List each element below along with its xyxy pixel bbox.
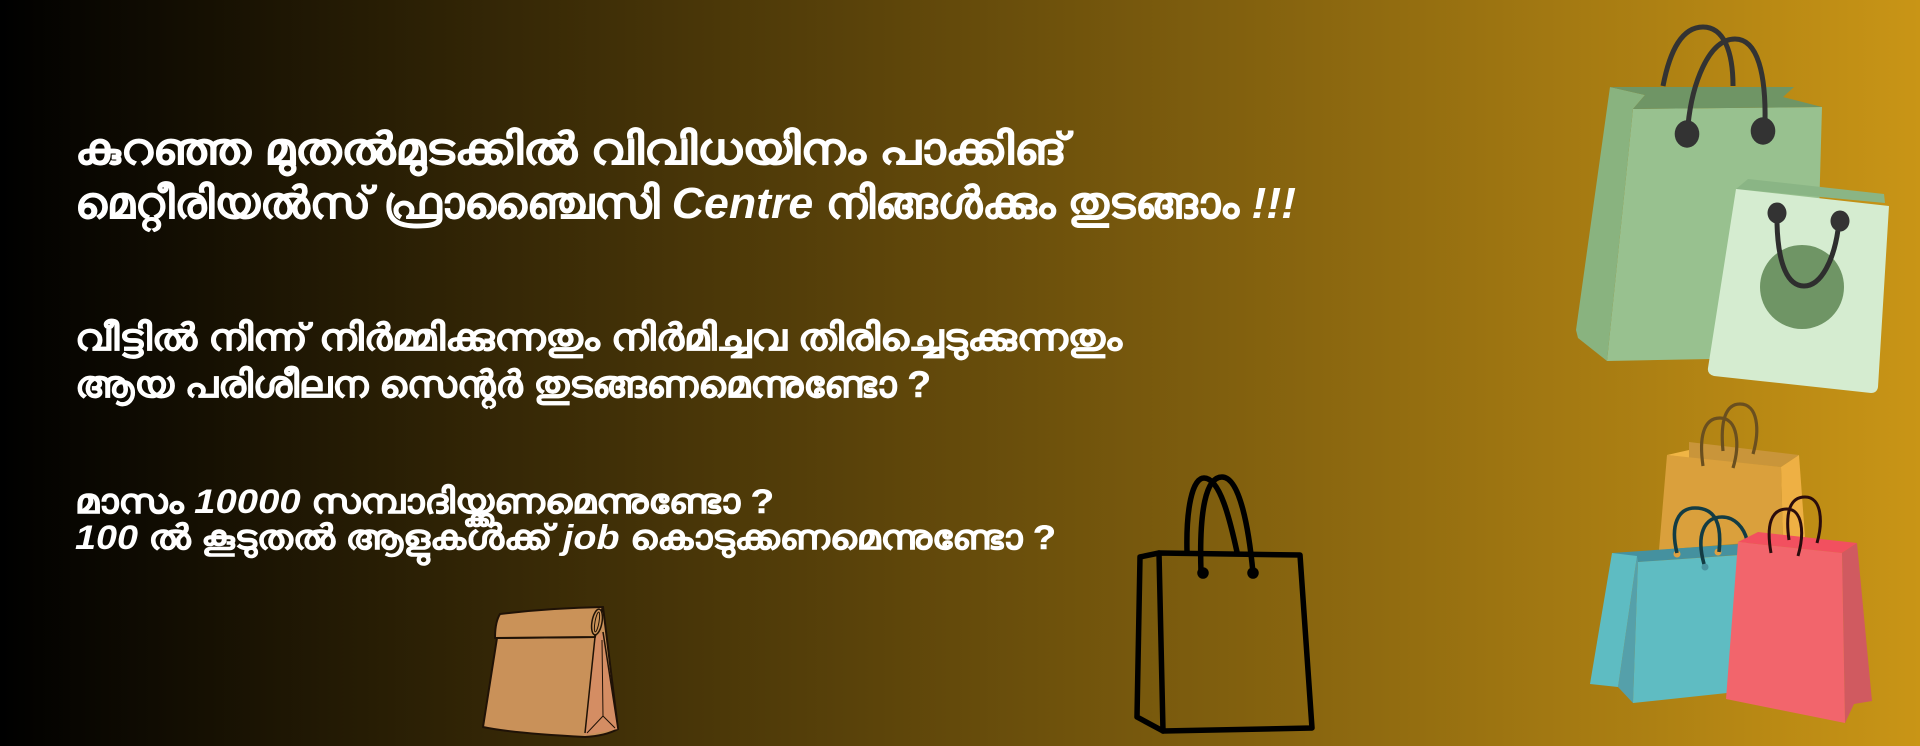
- icon: red shopping bag: [1726, 497, 1872, 723]
- icon: blue shopping bag: [1590, 508, 1747, 703]
- text block: income and jobs question: 100 ൽ കൂടുതൽ ആളുകൾക്ക് job കൊടുക്കണമെന്നുണ്ടോ ?: [75, 519, 1056, 566]
- text block: training centre question: [75, 317, 1124, 409]
- heading: മെറ്റീരിയൽസ് ഫ്രാഞ്ചൈസി Centre നിങ്ങൾക്കും തുടങ്ങാം !!!: [75, 179, 1296, 233]
- text block: training centre question: വീട്ടിൽ നിന്ന് നിർമ്മിക്കുന്നതും നിർമിച്ചവ തിരിച്ചെടുക്കുന്നതും: [75, 317, 1124, 361]
- text block: income and jobs question: മാസം 10000 സമ്പാദിയ്ക്കണമെന്നുണ്ടോ ?: [75, 483, 774, 527]
- heading: [75, 125, 1296, 233]
- heading: കുറഞ്ഞ മുതൽമുടക്കിൽ വിവിധയിനം പാക്കിങ്: [75, 125, 1074, 177]
- icon: green shopping bags: [1576, 27, 1889, 393]
- icon: brown paper bag: [483, 607, 618, 737]
- icon: black outline bag: [1137, 477, 1312, 731]
- text block: income and jobs question: [75, 483, 1056, 566]
- text block: training centre question: ആയ പരിശീലന സെന്റർ തുടങ്ങണമെന്നുണ്ടോ ?: [75, 364, 931, 409]
- icon: orange shopping bag: [1659, 404, 1805, 550]
